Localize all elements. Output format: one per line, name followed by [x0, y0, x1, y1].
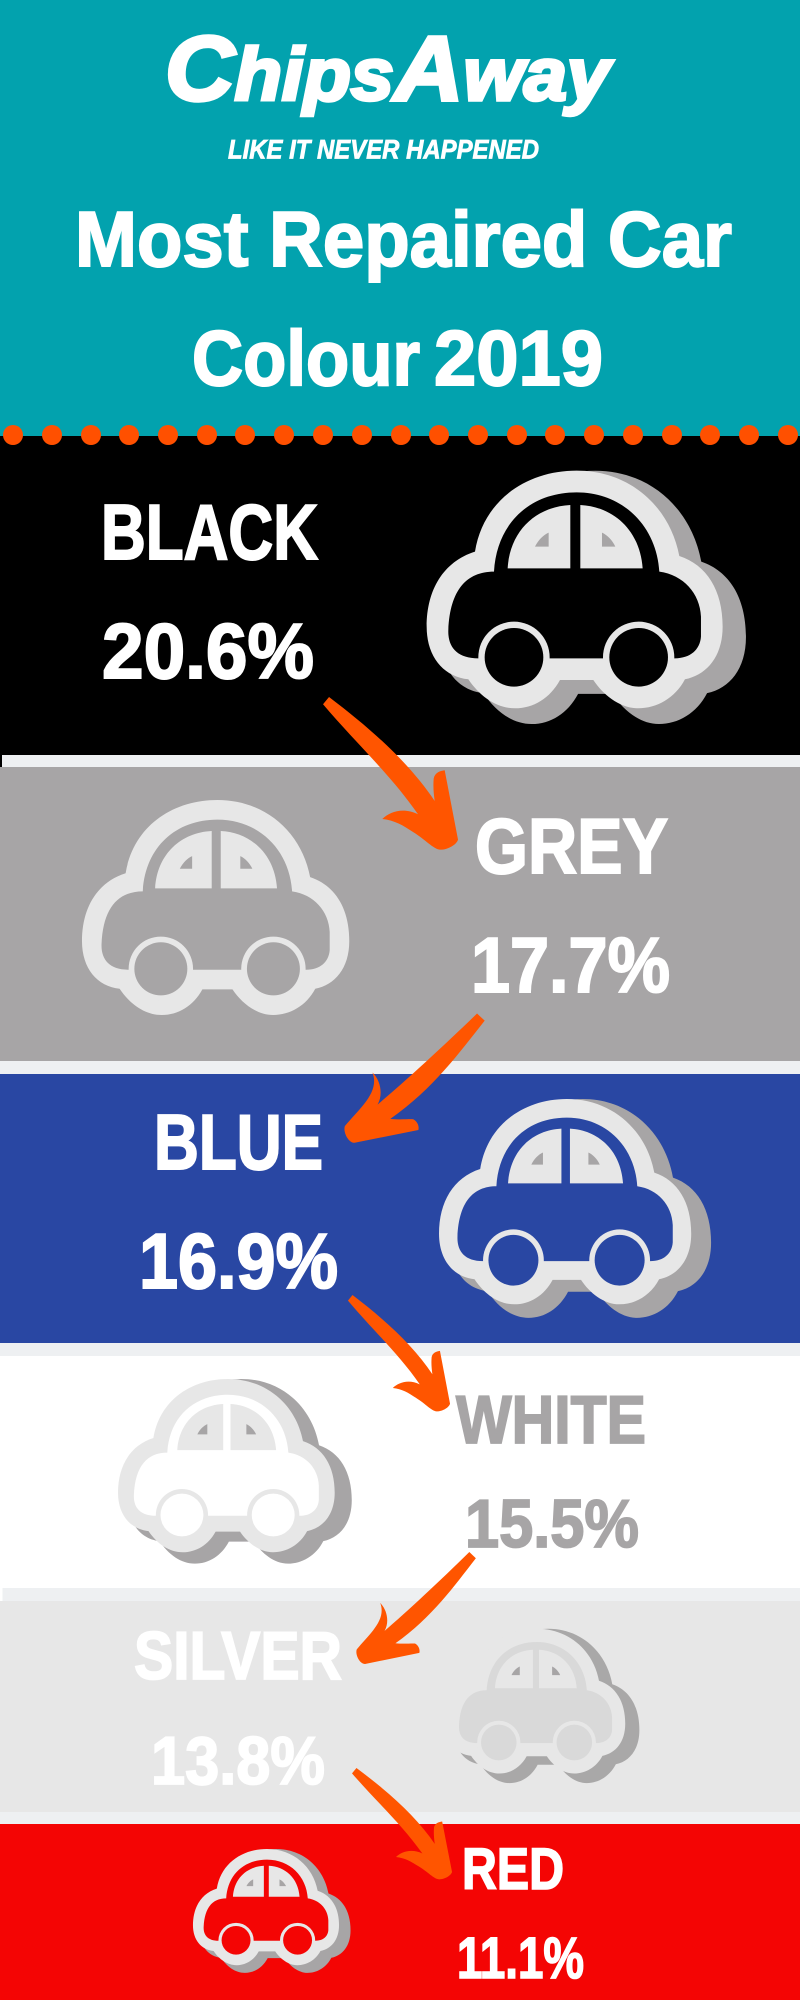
value: 16.9%: 16.9%: [139, 1217, 338, 1305]
title: Most Repaired Car: [75, 195, 732, 283]
icon: white car: [118, 1379, 352, 1564]
arrow: black to grey: [323, 697, 458, 850]
icon: red car: [193, 1849, 351, 1973]
arrow: silver to red: [352, 1768, 452, 1879]
title: [75, 195, 732, 402]
tagline: LIKE IT NEVER HAPPENED: [228, 134, 539, 164]
value: 13.8%: 13.8%: [151, 1723, 325, 1799]
arrow: grey to blue: [344, 1014, 485, 1143]
label: BLACK: BLACK: [101, 488, 318, 576]
label: RED: RED: [462, 1837, 564, 1902]
dotted divider: [3, 425, 798, 445]
panel: silver: [0, 1601, 800, 1812]
value: 17.7%: 17.7%: [471, 921, 670, 1009]
logo: ChipsAway: ChipsAway: [165, 18, 614, 120]
title: 2019: [434, 314, 603, 402]
arrow: blue to white: [348, 1295, 450, 1411]
title: Colour: [192, 314, 420, 402]
label: SILVER: SILVER: [134, 1618, 342, 1694]
label: WHITE: WHITE: [456, 1382, 646, 1458]
panel: blue: [0, 1074, 800, 1343]
icon: black car: [427, 471, 746, 724]
value: 15.5%: 15.5%: [465, 1486, 639, 1562]
arrow: white to silver: [356, 1552, 476, 1664]
value: 11.1%: 11.1%: [457, 1926, 584, 1991]
value: 20.6%: 20.6%: [102, 607, 314, 695]
panel: red: [0, 1824, 800, 2000]
panel: white: [0, 1356, 800, 1601]
label: GREY: GREY: [475, 802, 668, 890]
panel: grey: [0, 767, 800, 1061]
panel: black: [0, 436, 800, 767]
icon: silver car: [446, 1629, 639, 1783]
icon: grey car: [82, 800, 349, 1015]
label: BLUE: BLUE: [154, 1098, 323, 1186]
icon: blue car: [439, 1099, 711, 1318]
panel: header: [0, 0, 800, 436]
